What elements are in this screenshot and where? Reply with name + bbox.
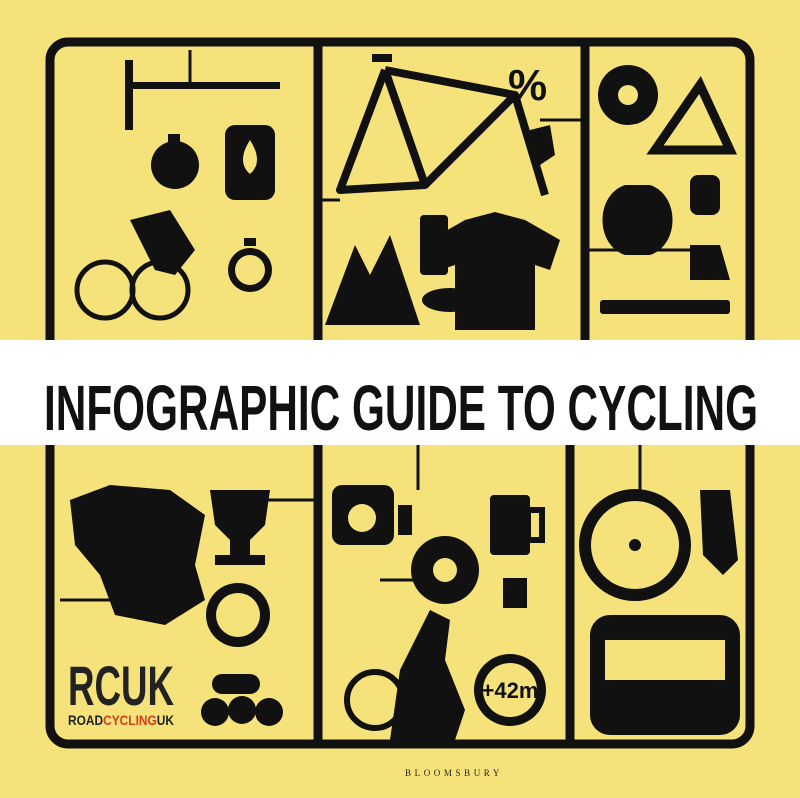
icon: bike frame [340, 58, 545, 195]
logo: RCUK: ROADCYCLINGUK [68, 712, 174, 728]
icons top-middle panel: % [508, 61, 547, 110]
icons bottom-middle panel [332, 485, 546, 740]
icons bottom-middle panel: +42m [482, 678, 538, 703]
title band [0, 340, 800, 445]
logo: RCUK: RCUK [68, 654, 174, 717]
icons top-middle panel [325, 61, 560, 330]
frame: sprue outline [50, 42, 750, 744]
icons top-right panel [598, 65, 730, 314]
logo: RCUK [68, 654, 174, 728]
publisher: BLOOMSBURY [405, 768, 503, 778]
icons top-left panel [77, 60, 280, 318]
icons bottom-left panel [70, 485, 283, 726]
icons bottom-right panel [585, 490, 740, 735]
